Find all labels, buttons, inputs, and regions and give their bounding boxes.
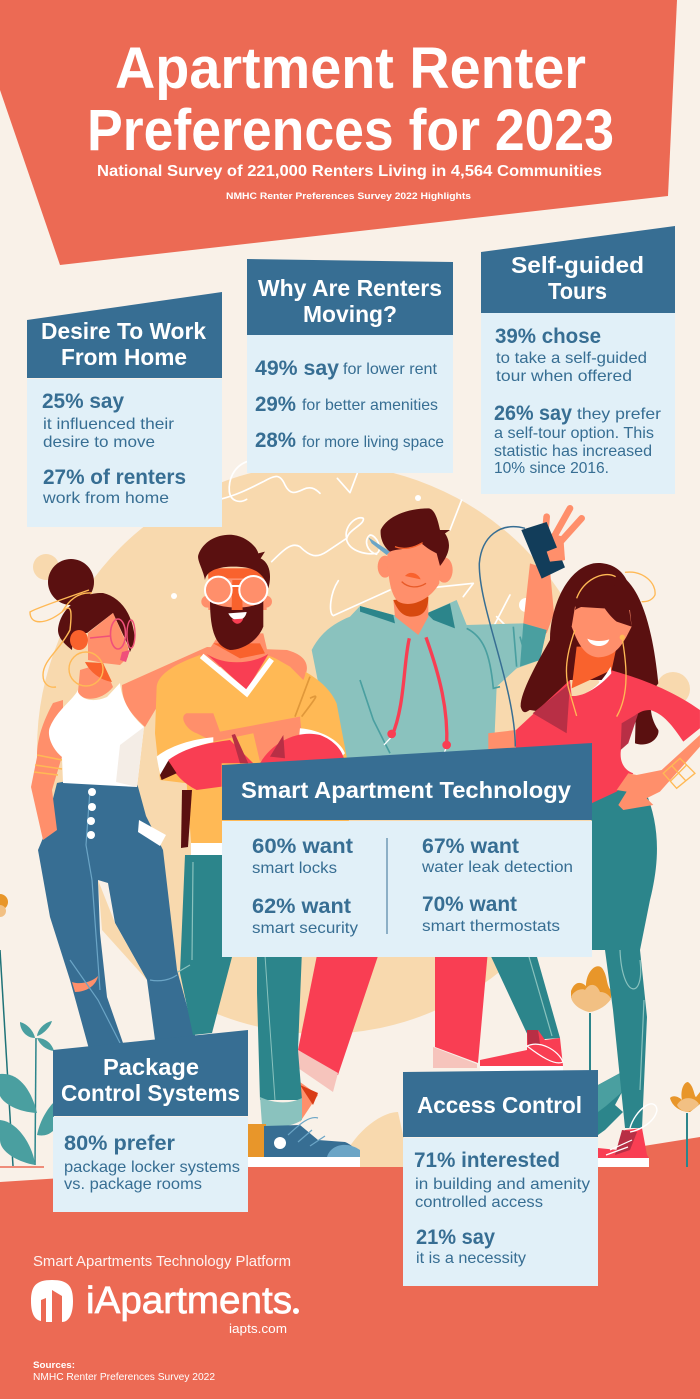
panel: smart apartment technology: 67% want: [422, 835, 519, 858]
white squiggles: [220, 462, 510, 640]
panel: why are renters moving: [247, 259, 453, 473]
panel: desire to work from home: 25% say: [42, 390, 124, 413]
panel: self-guided tours: a self-tour option. This: [494, 425, 654, 442]
crossed arms: [183, 713, 302, 762]
panel: package control systems: 80% prefer: [64, 1132, 175, 1155]
title: Apartment Renter: [115, 36, 586, 101]
neck and collar: [207, 633, 268, 692]
orange shoe: [248, 1124, 266, 1157]
panel: why are renters moving: Why Are Renters: [258, 275, 442, 301]
panel: smart apartment technology: Smart Apartment Technology: [241, 777, 571, 803]
pencil: [368, 537, 390, 555]
shirt: [155, 655, 350, 850]
rear arm: [31, 700, 63, 840]
sources: Sources:: [33, 1360, 75, 1371]
panel: smart apartment technology: water leak detection: [421, 859, 573, 876]
person: bearded man: [155, 535, 350, 850]
panel: why are renters moving: Moving?: [303, 301, 397, 327]
logo: iApartments: [31, 1280, 299, 1336]
glasses: [205, 577, 232, 603]
arm reaching over: [122, 647, 307, 727]
panel: why are renters moving: for better amenities: [302, 397, 438, 414]
panel: why are renters moving: for more living space: [302, 434, 444, 451]
panel: smart apartment technology: smart thermostats: [422, 918, 560, 935]
person: man in teal hoodie: [312, 508, 582, 763]
hand on shoulder: [267, 650, 306, 680]
face: [572, 607, 632, 657]
woman lower legs: [590, 790, 657, 1167]
cuff: [260, 1097, 302, 1127]
flowers and leaf right: [571, 966, 700, 1167]
bottom coral ground: [0, 1137, 700, 1399]
teal leg: [488, 950, 560, 1040]
fringe: [575, 582, 632, 627]
panel: access control: in building and amenity: [415, 1176, 590, 1193]
panel: why are renters moving: 49% say: [255, 357, 339, 380]
panel: self-guided tours: they prefer: [577, 406, 662, 423]
panel: package control systems: package locker systems: [64, 1159, 240, 1176]
panel: access control: [403, 1070, 598, 1286]
red top: [516, 670, 700, 803]
sources: [33, 1360, 215, 1383]
hoops and hair tie: [69, 652, 103, 686]
sources: NMHC Renter Preferences Survey 2022: [33, 1372, 215, 1383]
panel: self-guided tours: statistic has increased: [494, 443, 652, 460]
title: Preferences for 2023: [87, 98, 614, 163]
face: [88, 613, 128, 665]
beard: [210, 600, 263, 650]
panel: desire to work from home: From Home: [61, 344, 187, 370]
hair: [198, 535, 270, 588]
face: [201, 596, 213, 608]
face: [387, 540, 440, 604]
panel: access control: Access Control: [417, 1092, 582, 1118]
logo: iApartments: iApartments: [86, 1280, 292, 1322]
logo: iApartments: iapts.com: [229, 1321, 287, 1336]
jeans: [38, 778, 200, 1060]
beige background circle: [33, 464, 690, 1167]
panel: smart apartment technology: smart locks: [252, 860, 337, 877]
person: woman in white top and jeans: [30, 559, 307, 1060]
person: woman in red top: [516, 563, 700, 810]
panel: smart apartment technology: [222, 743, 592, 957]
plants left: [0, 894, 54, 1167]
panel: package control systems: [53, 1030, 248, 1212]
finger wrap: [547, 545, 565, 562]
strings: [392, 638, 409, 737]
panel: smart apartment technology: 70% want: [422, 893, 517, 916]
blue shoe: [264, 1125, 360, 1157]
panel: desire to work from home: Desire To Work: [41, 318, 206, 344]
panel: self-guided tours: [481, 226, 675, 494]
panel: self-guided tours: tour when offered: [496, 368, 632, 385]
ears: [378, 556, 392, 578]
white dots: [171, 495, 533, 612]
panel: package control systems: vs. package rooms: [64, 1176, 202, 1193]
earphone cable: [479, 527, 525, 747]
logo icon: [31, 1280, 73, 1322]
hair bun: [48, 559, 94, 605]
platform tagline: Smart Apartments Technology Platform: [33, 1254, 291, 1270]
panel: self-guided tours: Tours: [548, 278, 607, 304]
panel: why are renters moving: 28%: [255, 429, 296, 452]
panel: desire to work from home: [27, 292, 222, 527]
skin behind woman: [488, 730, 516, 750]
panel: access control: controlled access: [415, 1194, 543, 1211]
panel: desire to work from home: desire to move: [43, 434, 155, 451]
panel: self-guided tours: 39% chose: [495, 325, 601, 348]
panel: smart apartment technology: smart security: [252, 920, 358, 937]
subtitle: National Survey of 221,000 Renters Living in 4,564 Communities: [97, 163, 602, 180]
panel: access control: 71% interested: [414, 1149, 560, 1172]
head hair: [58, 593, 135, 652]
panel: access control: 21% say: [416, 1226, 495, 1249]
neck: [393, 597, 428, 635]
neck: [78, 663, 113, 699]
panel: self-guided tours: to take a self-guided: [496, 350, 647, 367]
hair: [381, 508, 450, 566]
panel: desire to work from home: it influenced their: [43, 416, 175, 433]
man shirt hem and trousers: [178, 790, 360, 1167]
survey credit: NMHC Renter Preferences Survey 2022 Highlights: [226, 191, 471, 201]
earrings and hair tie: [566, 572, 655, 717]
panel: why are renters moving: for lower rent: [343, 361, 438, 378]
panel: package control systems: Control Systems: [61, 1080, 240, 1106]
panel: desire to work from home: work from home: [42, 490, 169, 507]
panel: smart apartment technology: 60% want: [252, 835, 353, 858]
raised arm and hand: [523, 563, 554, 633]
glasses: [110, 619, 126, 649]
panel: self-guided tours: 26% say: [494, 402, 572, 425]
title: [87, 36, 614, 163]
panel: smart apartment technology: 62% want: [252, 895, 351, 918]
arm: [617, 735, 700, 810]
panel: package control systems: Package: [103, 1054, 199, 1080]
hoodie: [312, 600, 547, 760]
red sneaker: [480, 1030, 563, 1066]
panel: self-guided tours: 10% since 2016.: [494, 460, 609, 477]
hair: [521, 563, 658, 745]
phone: [521, 522, 565, 579]
white top: [49, 683, 144, 787]
top coral banner: [0, 0, 677, 265]
panel: access control: it is a necessity: [416, 1250, 526, 1267]
panel: why are renters moving: 29%: [255, 393, 296, 416]
panel: self-guided tours: Self-guided: [511, 252, 644, 278]
neck: [572, 647, 617, 688]
panel: desire to work from home: 27% of renters: [43, 466, 186, 489]
person: red trousers: [298, 950, 563, 1122]
